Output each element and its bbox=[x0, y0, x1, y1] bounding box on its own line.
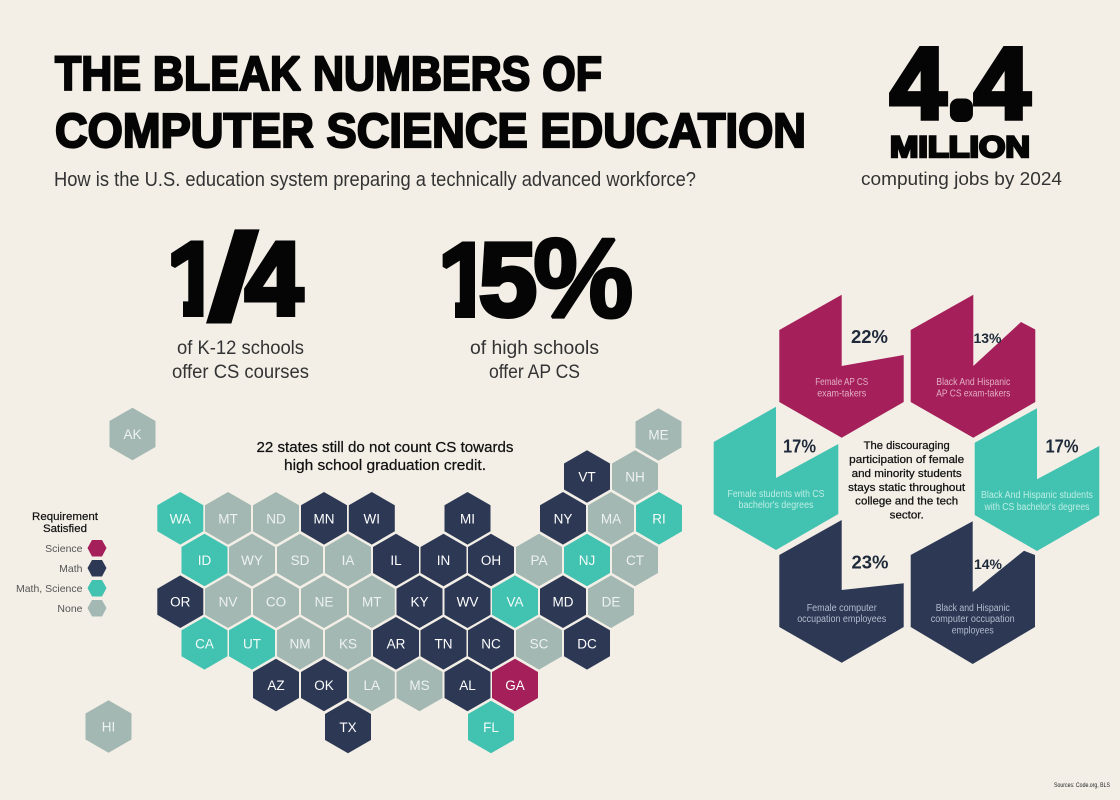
title: THE BLEAK NUMBERS OF bbox=[55, 48, 602, 101]
state: OK bbox=[301, 659, 347, 711]
callout: discouraging participation text: participation of female bbox=[849, 454, 964, 466]
state: LA: LA bbox=[364, 678, 380, 693]
state: MA: MA bbox=[601, 511, 621, 526]
state: WI bbox=[349, 492, 395, 545]
stat: 1/4 of K-12 schools: offer CS courses bbox=[172, 362, 309, 383]
state: FL bbox=[468, 701, 514, 753]
state: OR bbox=[157, 575, 203, 628]
state: UT: UT bbox=[243, 636, 261, 651]
state: WA: WA bbox=[170, 511, 191, 526]
panel: female students with CS bachelor's degrees 17% bbox=[714, 407, 838, 550]
state: OR: OR bbox=[170, 595, 191, 610]
state: LA bbox=[349, 659, 395, 711]
stat: 1/4 of K-12 schools: 4 bbox=[245, 222, 303, 338]
callout: discouraging participation text: sector. bbox=[890, 510, 924, 522]
stat: 4.4 million computing jobs: . bbox=[954, 69, 968, 125]
state: SC bbox=[516, 617, 562, 670]
state: RI bbox=[636, 492, 682, 545]
state: AR bbox=[373, 617, 419, 670]
panel: Black and Hispanic AP CS exam-takers 13%: AP CS exam-takers bbox=[936, 388, 1010, 400]
panel: Black and Hispanic students with CS bachelor's degrees 17% bbox=[975, 408, 1099, 551]
state: ND: ND bbox=[266, 511, 286, 526]
state: MI bbox=[444, 492, 490, 545]
panel: Black and Hispanic students with CS bachelor's degrees 17%: with CS bachelor's degrees bbox=[984, 502, 1090, 513]
state: NV: NV bbox=[219, 595, 237, 610]
state: IL: IL bbox=[390, 553, 402, 568]
panel: female AP CS exam-takers 22%: 22% bbox=[851, 327, 888, 347]
map heading: high school graduation credit. bbox=[284, 458, 486, 474]
state: NE bbox=[301, 575, 347, 628]
state: RI: RI bbox=[652, 511, 666, 526]
state: MD bbox=[540, 575, 586, 628]
state: DC: DC bbox=[577, 636, 597, 651]
panel: Black and Hispanic computer occupation employees 14%: computer occupation bbox=[931, 614, 1015, 625]
panel: female computer occupation employees 23%: 23% bbox=[852, 553, 888, 573]
stat: 15% of high schools: 1 bbox=[438, 222, 496, 338]
state: CA: CA bbox=[195, 636, 214, 651]
stat: 15% of high schools: offer AP CS bbox=[489, 362, 580, 383]
stat: 4.4 million computing jobs: computing jobs by 2024 bbox=[861, 169, 1062, 189]
panel: female students with CS bachelor's degrees 17%: Female students with CS bbox=[728, 489, 825, 500]
state: AZ bbox=[253, 659, 299, 711]
stat: 1/4 of K-12 schools: / bbox=[205, 208, 261, 347]
state: CO bbox=[253, 575, 299, 628]
state: WV: WV bbox=[457, 595, 478, 610]
state: VT bbox=[564, 450, 610, 503]
state: HI: HI bbox=[102, 720, 115, 734]
state: ID: ID bbox=[198, 553, 212, 568]
stat: 4.4 million computing jobs: 4 bbox=[974, 28, 1030, 140]
state: SD: SD bbox=[291, 553, 310, 568]
state: MT: MT bbox=[218, 511, 238, 526]
map heading: 22 states still do not count CS towards bbox=[256, 440, 514, 456]
state: OK: OK bbox=[314, 678, 334, 693]
state: MI: MI bbox=[460, 511, 475, 526]
state: PA bbox=[516, 534, 562, 586]
callout: discouraging participation text: stays static throughout bbox=[848, 482, 965, 494]
state: SC: SC bbox=[530, 636, 549, 651]
state: AK bbox=[110, 408, 156, 460]
state: IL bbox=[373, 534, 419, 586]
state: MD: MD bbox=[552, 595, 574, 610]
state: IA: IA bbox=[342, 553, 354, 568]
state: AK: AK bbox=[123, 427, 142, 442]
state: DE bbox=[588, 575, 634, 628]
state: NJ: NJ bbox=[579, 553, 595, 568]
panel: Black and Hispanic computer occupation employees 14%: 14% bbox=[974, 556, 1003, 572]
state: CA bbox=[182, 617, 228, 670]
legend item: none: None bbox=[57, 603, 83, 615]
stat: 15% of high schools: of high schools bbox=[470, 338, 599, 359]
state: IN: IN bbox=[437, 553, 450, 568]
stat: 15% of high schools: % bbox=[533, 215, 633, 341]
panel: Black and Hispanic students with CS bachelor's degrees 17%: Black And Hispanic students bbox=[981, 490, 1093, 501]
state: VA: VA bbox=[506, 595, 524, 610]
stat: 15% of high schools bbox=[442, 236, 632, 378]
state: MN bbox=[301, 492, 347, 545]
state: VA bbox=[492, 575, 538, 628]
state: TX: TX bbox=[339, 720, 357, 735]
state: NY bbox=[540, 492, 586, 545]
state: KY: KY bbox=[410, 595, 429, 610]
state: MT (second tile): MT bbox=[362, 595, 382, 610]
state: PA: PA bbox=[530, 553, 548, 568]
state: VT: VT bbox=[578, 470, 596, 484]
callout: discouraging participation text bbox=[848, 440, 965, 522]
state: TX bbox=[325, 701, 371, 753]
stat: 1/4 of K-12 schools: 1 bbox=[166, 222, 224, 338]
legend item: math: Math bbox=[59, 563, 83, 575]
state: OH bbox=[468, 534, 514, 586]
state: CT bbox=[612, 534, 658, 586]
state: NV bbox=[205, 575, 251, 628]
state: WY: WY bbox=[241, 553, 263, 568]
state: KS bbox=[325, 617, 371, 670]
state: OH: OH bbox=[481, 553, 501, 568]
panel: Black and Hispanic AP CS exam-takers 13%: 13% bbox=[974, 330, 1002, 346]
state: KS: KS bbox=[339, 636, 357, 651]
state: NM: NM bbox=[290, 636, 310, 651]
state: WV bbox=[444, 575, 490, 628]
state: FL: FL bbox=[483, 720, 499, 735]
panel: Black and Hispanic computer occupation employees 14%: Black and Hispanic bbox=[936, 603, 1010, 614]
state: NY: NY bbox=[554, 511, 572, 526]
state: CT: CT bbox=[626, 553, 644, 568]
state: WY bbox=[229, 534, 275, 586]
state: ID bbox=[182, 534, 228, 586]
state: DC bbox=[564, 617, 610, 670]
sources note: Sources: Code.org, BLS bbox=[1054, 783, 1110, 789]
state: UT bbox=[229, 617, 275, 670]
panel: female computer occupation employees 23%: occupation employees bbox=[797, 614, 886, 625]
state: ME: ME bbox=[648, 428, 669, 442]
panel: female AP CS exam-takers 22%: exam-takers bbox=[817, 388, 866, 400]
state: SD bbox=[277, 534, 323, 586]
state: AR: AR bbox=[387, 636, 406, 651]
state: NH bbox=[612, 450, 658, 503]
subtitle: How is the U.S. education system preparing a technically advanced workforce? bbox=[54, 169, 696, 191]
state: MT (second tile) bbox=[349, 575, 395, 628]
state: NE: NE bbox=[315, 595, 333, 610]
state: AZ: AZ bbox=[267, 678, 285, 693]
state: ME bbox=[636, 408, 682, 461]
state: DE: DE bbox=[602, 595, 620, 610]
legend: requirement satisfied: Requirement bbox=[32, 511, 98, 523]
callout: discouraging participation text: college and the tech bbox=[855, 496, 958, 508]
state: NM bbox=[277, 617, 323, 670]
panel: female students with CS bachelor's degrees 17%: 17% bbox=[783, 437, 816, 457]
state: MA bbox=[588, 492, 634, 545]
state: MN: MN bbox=[314, 511, 334, 526]
stat: 4.4 million computing jobs: 4 bbox=[890, 28, 946, 140]
state: CO: CO bbox=[266, 595, 286, 610]
stat: 1/4 of K-12 schools: of K-12 schools bbox=[177, 338, 304, 359]
map heading bbox=[256, 440, 514, 474]
panel: Black and Hispanic computer occupation employees 14% bbox=[911, 521, 1035, 664]
hex tile map of U.S. states bbox=[86, 408, 682, 753]
panel: female AP CS exam-takers 22% bbox=[779, 295, 904, 438]
legend item: math, science: Math, Science bbox=[16, 583, 83, 595]
state: TN: TN bbox=[434, 636, 452, 651]
stat: 4.4 million computing jobs: MILLION bbox=[890, 131, 1030, 164]
panel: Black and Hispanic AP CS exam-takers 13%: Black And Hispanic bbox=[936, 377, 1010, 388]
panel: Black and Hispanic computer occupation employees 14%: employees bbox=[952, 626, 994, 636]
panel: female computer occupation employees 23% bbox=[779, 520, 904, 663]
panel: female students with CS bachelor's degrees 17%: bachelor's degrees bbox=[738, 500, 814, 511]
stat: 15% of high schools: 5 bbox=[479, 222, 537, 338]
state: NC bbox=[468, 617, 514, 670]
title bbox=[55, 48, 806, 158]
stat: 1/4 of K-12 schools bbox=[171, 229, 308, 378]
state: ND bbox=[253, 492, 299, 545]
state: MS: MS bbox=[409, 678, 430, 693]
state: WI: WI bbox=[364, 511, 380, 526]
state: IA bbox=[325, 534, 371, 586]
stat: 4.4 million computing jobs bbox=[861, 28, 1062, 189]
state: AL: AL bbox=[459, 678, 476, 693]
state: GA bbox=[492, 659, 538, 711]
panel: Black and Hispanic students with CS bachelor's degrees 17%: 17% bbox=[1046, 437, 1078, 457]
state: NH: NH bbox=[625, 470, 645, 484]
state: NJ bbox=[564, 534, 610, 586]
state: MS bbox=[396, 659, 442, 711]
state: AL bbox=[444, 659, 490, 711]
legend item: science: Science bbox=[45, 543, 83, 555]
state: TN bbox=[420, 617, 466, 670]
state: IN bbox=[420, 534, 466, 586]
state: MT bbox=[205, 492, 251, 545]
state: KY bbox=[396, 575, 442, 628]
panel: female computer occupation employees 23%: Female computer bbox=[807, 603, 877, 614]
panel: female AP CS exam-takers 22%: Female AP CS bbox=[815, 377, 868, 388]
state: WA bbox=[157, 492, 203, 545]
state: NC: NC bbox=[481, 636, 501, 651]
state: HI bbox=[86, 700, 132, 753]
title: COMPUTER SCIENCE EDUCATION bbox=[55, 105, 806, 158]
callout: discouraging participation text: and minority students bbox=[852, 468, 962, 480]
callout: discouraging participation text: The discouraging bbox=[864, 440, 950, 452]
legend: requirement satisfied: Satisfied bbox=[43, 523, 87, 535]
state: GA: GA bbox=[505, 678, 525, 693]
panel: Black and Hispanic AP CS exam-takers 13% bbox=[911, 295, 1035, 438]
legend: requirement satisfied bbox=[16, 511, 106, 616]
